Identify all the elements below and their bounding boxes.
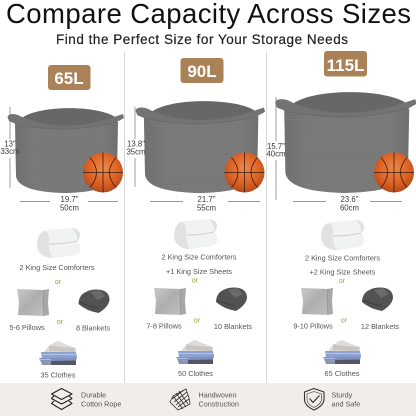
feature: sturdy and safe	[304, 388, 360, 410]
icon: clothes	[39, 341, 77, 365]
dimension: width	[150, 195, 260, 212]
or: or	[192, 278, 199, 284]
icon: layers	[52, 388, 72, 410]
dimension: width	[20, 195, 118, 212]
dimension: height: 33cm	[0, 147, 20, 156]
dimension: width: 19.7"	[61, 195, 79, 204]
icon: blanket	[216, 288, 247, 311]
dimension: width	[293, 195, 402, 212]
icon: comforter	[37, 228, 80, 258]
badge: 65L: 65L	[54, 69, 84, 88]
or: or	[57, 319, 64, 326]
text: Durable	[81, 390, 106, 400]
or: or	[194, 318, 201, 324]
basketball	[83, 152, 123, 192]
label: comforters: 2 King Size Comforters	[19, 263, 95, 272]
dimension: width: 21.7"	[198, 195, 216, 204]
dimension: height: 35cm	[126, 148, 146, 156]
label: blankets: 10 Blankets	[214, 322, 252, 331]
dimension: height: 15.7"	[267, 142, 285, 151]
icon: pillows	[301, 288, 333, 315]
basket: 90L	[136, 101, 265, 193]
icon: blanket	[362, 288, 393, 311]
basket: 115L	[275, 92, 416, 193]
feature: handwoven construction	[170, 389, 239, 410]
or: or	[339, 278, 346, 285]
text: Handwoven	[198, 390, 236, 400]
dimension: width: 60cm	[340, 204, 359, 212]
icon: pillows	[17, 289, 49, 316]
badge: 115L: 115L	[327, 56, 364, 75]
label: clothes: 35 Clothes	[41, 370, 76, 380]
basketball	[224, 152, 264, 192]
dimension: height	[126, 107, 146, 187]
dimension: width: 55cm	[197, 204, 216, 212]
panel: 65L	[0, 65, 124, 380]
text: and Safe	[332, 400, 360, 408]
label: clothes: 50 Clothes	[178, 369, 213, 378]
dimension: width: 50cm	[60, 204, 79, 212]
text: Construction	[198, 400, 239, 408]
text	[198, 390, 239, 408]
dimension: height: 13.8"	[127, 140, 145, 148]
icon: clothes	[323, 340, 361, 364]
label: sheets: +1 King Size Sheets	[166, 267, 232, 276]
icon: clothes	[176, 340, 214, 364]
label: blankets: 12 Blankets	[361, 322, 399, 331]
icon: pillows	[154, 288, 186, 315]
badge: 65L	[48, 65, 90, 90]
icon: weave	[170, 389, 190, 410]
text: Cotton Rope	[81, 400, 121, 408]
text: Sturdy	[332, 390, 353, 400]
panel: 90L	[126, 58, 265, 378]
feature: durable cotton rope	[52, 388, 121, 410]
icon: shield	[304, 388, 324, 410]
icon: blanket	[78, 290, 110, 313]
or: or	[55, 279, 62, 286]
text	[332, 390, 360, 408]
label: clothes: 65 Clothes	[325, 369, 360, 378]
dimension: height	[266, 97, 286, 200]
label: comforters: 2 King Size Comforters	[305, 254, 380, 262]
dimension: width: 23.6"	[341, 195, 359, 204]
label: pillows: 7-8 Pillows	[146, 322, 182, 330]
or: or	[341, 318, 348, 324]
subtitle: Find the Perfect Size for Your Storage Needs	[56, 32, 348, 47]
badge: 90L: 90L	[187, 62, 217, 81]
dimension: height	[0, 107, 20, 188]
text	[81, 390, 121, 408]
icon: comforter	[321, 220, 364, 250]
dimension: height: 13"	[4, 140, 16, 148]
label: pillows: 5-6 Pillows	[9, 323, 45, 332]
footer band	[0, 383, 416, 416]
label: pillows: 9-10 Pillows	[293, 322, 333, 330]
basketball	[374, 152, 414, 192]
panel: 115L	[266, 51, 416, 378]
badge: 115L	[324, 51, 367, 76]
label: blankets: 8 Blankets	[76, 324, 110, 332]
badge: 90L	[180, 58, 224, 83]
label: sheets: +2 King Size Sheets	[310, 268, 376, 276]
basket: 65L	[8, 108, 124, 193]
icon: comforter	[174, 219, 217, 249]
dimension: height: 40cm	[266, 150, 286, 158]
label: comforters: 2 King Size Comforters	[161, 252, 237, 262]
